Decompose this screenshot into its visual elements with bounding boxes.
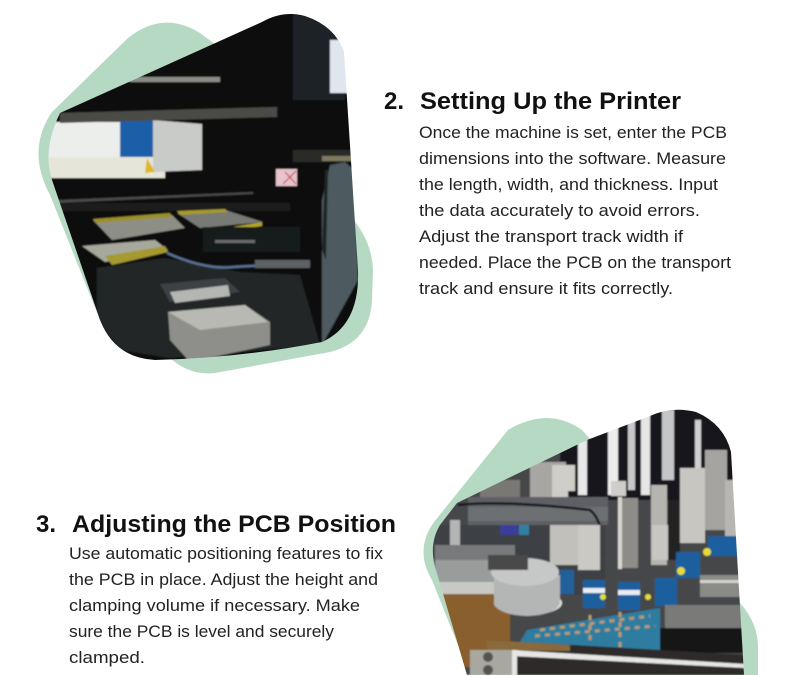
text block: step 2 body: dimensions into the software. Measure bbox=[419, 150, 726, 168]
text block: step 3 body: sure the PCB is level and securely bbox=[69, 623, 335, 641]
text block: step 2 body: Adjust the transport track width if bbox=[419, 228, 683, 246]
heading: step 3: 3. bbox=[36, 511, 56, 538]
text block: step 2 body bbox=[419, 124, 731, 298]
text block: step 2 body: Once the machine is set, enter the PCB bbox=[419, 124, 727, 142]
text block: step 2 body: track and ensure it fits correctly. bbox=[419, 280, 673, 298]
heading: step 3: Adjusting the PCB Position bbox=[72, 511, 396, 538]
heading: step 2: Setting Up the Printer bbox=[420, 88, 681, 115]
heading: step 2: 2. bbox=[384, 88, 404, 115]
text block: step 2 body: the length, width, and thickness. Input bbox=[419, 176, 718, 194]
green backing shape: step 3 bbox=[423, 418, 758, 675]
text block: step 3 body: Use automatic positioning features to fix bbox=[69, 545, 384, 563]
text block: step 2 body: needed. Place the PCB on the transport bbox=[419, 254, 731, 272]
text block: step 3 body bbox=[69, 545, 384, 667]
photo: printer machine bbox=[48, 14, 358, 360]
panel: step 2 photo bbox=[30, 0, 373, 373]
text block: step 3 body: clamping volume if necessary. Make bbox=[69, 597, 360, 615]
text block: step 2 body: the data accurately to avoid errors. bbox=[419, 202, 700, 220]
text block: step 3 body: the PCB in place. Adjust the height and bbox=[69, 571, 378, 589]
photo: PCB placement heads bbox=[425, 405, 755, 675]
green backing shape: step 2 bbox=[38, 23, 373, 373]
panel: step 3 photo bbox=[423, 405, 758, 675]
text block: step 3 body: clamped. bbox=[69, 649, 145, 667]
